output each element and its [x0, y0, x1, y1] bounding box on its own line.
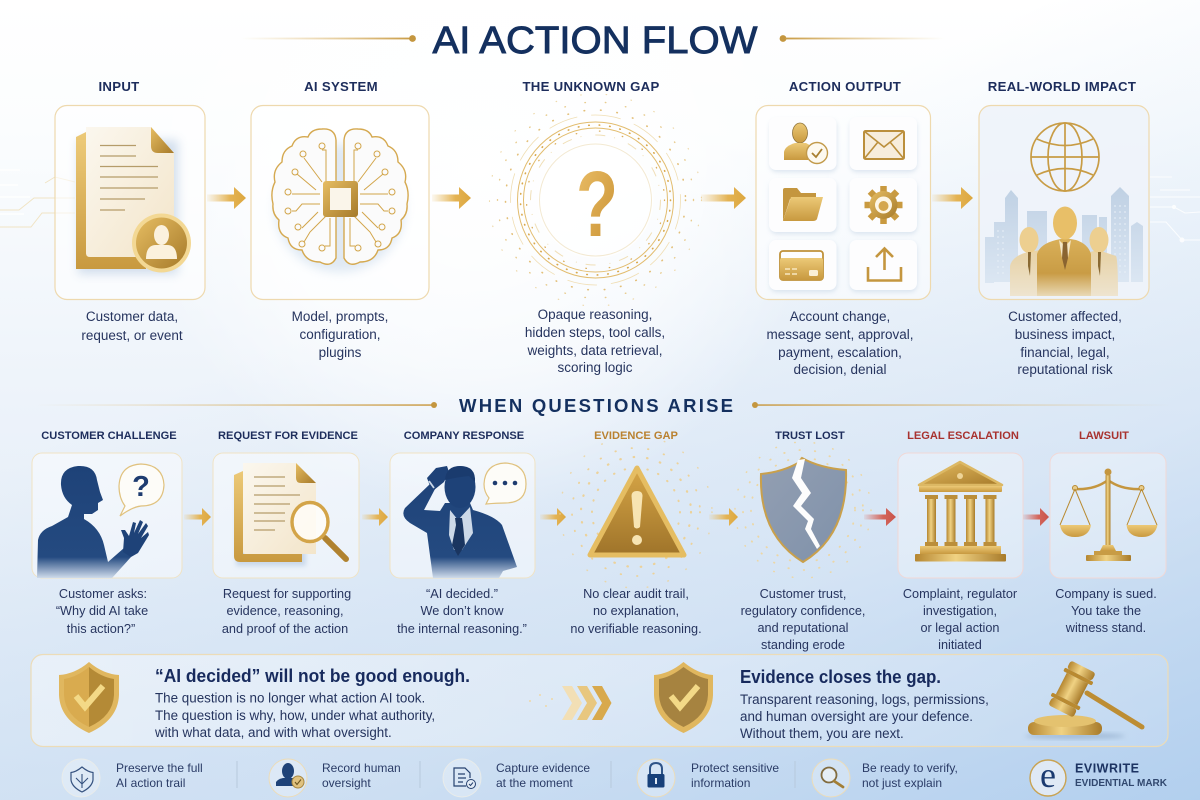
logo: Eviwrite: e: [1040, 755, 1056, 795]
caption: legal escalation: investigation,: [923, 604, 997, 618]
circuit lines left: [0, 170, 75, 227]
panel: the unknown gap: [490, 79, 702, 375]
icon: account change: [784, 123, 828, 164]
caption: action output: decision, denial: [793, 362, 887, 377]
caption: lawsuit: [1055, 587, 1157, 635]
dot field around shield: [735, 442, 871, 578]
caption: trust lost: regulatory confidence,: [741, 604, 865, 618]
caption: trust lost: [741, 587, 865, 652]
title: [241, 20, 945, 62]
callout: evidence closes the gap: [740, 666, 989, 741]
arrow: unknown gap to action output: [701, 187, 746, 209]
caption: real-world impact: business impact,: [1015, 327, 1115, 342]
caption: unknown gap: weights, data retrieval,: [526, 343, 663, 358]
logo: Eviwrite: [1030, 755, 1168, 796]
heading: real-world impact: REAL-WORLD IMPACT: [988, 79, 1136, 94]
icon: question mark in rings: ?: [576, 152, 618, 256]
logo: Eviwrite: EVIDENTIAL MARK: [1075, 778, 1168, 789]
icon: folder: [783, 188, 823, 221]
caption: action output: payment, escalation,: [778, 345, 902, 360]
icon: shield with check: [654, 662, 713, 733]
icon: customer silhouette with question: [37, 464, 164, 578]
heading: customer challenge: CUSTOMER CHALLENGE: [41, 430, 177, 442]
icon: three people: [1010, 206, 1118, 296]
item: protect information: information: [691, 776, 750, 790]
callout: evidence closes the gap: and human oversight are your defence.: [740, 709, 973, 724]
step: evidence gap: [560, 430, 712, 636]
caption: company response: [397, 587, 527, 636]
caption: unknown gap: hidden steps, tool calls,: [525, 325, 665, 340]
heading: request for evidence: REQUEST FOR EVIDENCE: [218, 430, 358, 442]
callout: AI decided: with what data, and with what oversight.: [154, 725, 392, 740]
icon: circuit brain: [272, 129, 408, 272]
item: human oversight: [269, 759, 401, 797]
heading: company response: COMPANY RESPONSE: [404, 430, 524, 442]
icon: warning triangle: [590, 468, 684, 555]
caption: real-world impact: reputational risk: [1017, 362, 1113, 377]
step: trust lost: [735, 430, 871, 652]
step: company response: [390, 430, 535, 636]
icon: broken shield: [761, 458, 846, 562]
callout: evidence closes the gap: Evidence closes the gap.: [740, 666, 941, 687]
callout: AI decided: The question is no longer what action AI took.: [155, 690, 425, 706]
caption: AI system: plugins: [319, 345, 362, 360]
icon: gear: [864, 186, 902, 224]
icon: question mark in rings: [490, 94, 702, 306]
caption: company response: We don’t know: [421, 604, 504, 618]
caption: unknown gap: [525, 307, 665, 375]
step: legal escalation: [898, 430, 1023, 652]
step: request for evidence: [213, 430, 359, 636]
caption: lawsuit: Company is sued.: [1055, 587, 1157, 601]
icon: message sent: [864, 131, 904, 159]
caption: request for evidence: Request for supporting: [223, 587, 351, 601]
item: preserve trail: AI action trail: [116, 776, 185, 790]
caption: legal escalation: or legal action: [920, 621, 1000, 635]
step: lawsuit: [1050, 430, 1166, 635]
caption: evidence gap: No clear audit trail,: [583, 587, 689, 601]
caption: input: Customer data,: [86, 309, 178, 324]
caption: legal escalation: Complaint, regulator: [903, 587, 1018, 601]
heading: input: INPUT: [98, 79, 140, 94]
item: protect information: Protect sensitive: [691, 761, 779, 775]
panel: conclusion banner: [31, 654, 1168, 746]
heading: legal escalation: LEGAL ESCALATION: [907, 430, 1019, 442]
caption: company response: the internal reasoning.”: [397, 622, 527, 636]
caption: action output: message sent, approval,: [766, 327, 914, 342]
callout: AI decided: “AI decided” will not be good enough.: [155, 665, 470, 686]
caption: customer challenge: this action?”: [67, 622, 135, 636]
tile shadows: [770, 120, 917, 292]
heading: action output: ACTION OUTPUT: [789, 79, 901, 94]
caption: evidence gap: no verifiable reasoning.: [570, 622, 702, 636]
caption: evidence gap: no explanation,: [593, 604, 679, 618]
caption: action output: Account change,: [790, 309, 890, 324]
caption: input: request, or event: [81, 328, 183, 343]
arrow: AI system to unknown gap: [432, 187, 471, 209]
item: human oversight: Record human: [322, 761, 401, 775]
caption: unknown gap: scoring logic: [557, 360, 633, 375]
callout: evidence closes the gap: Without them, you are next.: [740, 726, 904, 741]
icon: scales of justice: [1060, 468, 1158, 561]
icon: customer silhouette with question: ?: [132, 471, 150, 503]
caption: customer challenge: “Why did AI take: [56, 604, 148, 618]
logo: Eviwrite: EVIWRITE: [1075, 762, 1139, 776]
item: capture evidence: at the moment: [496, 776, 573, 790]
caption: real-world impact: financial, legal,: [1020, 345, 1110, 360]
step: customer challenge: [32, 430, 182, 636]
caption: request for evidence: [222, 587, 351, 636]
dividers: [237, 761, 795, 788]
panel: real-world impact: [979, 79, 1149, 377]
arrow: request to company response: [362, 508, 388, 526]
circuit lines right: [1150, 177, 1200, 242]
callout: evidence closes the gap: Transparent reasoning, logs, permissions,: [740, 692, 989, 707]
item: preserve trail: Preserve the full: [116, 761, 203, 775]
section heading: when questions arise: WHEN QUESTIONS ARISE: [459, 395, 733, 416]
heading: trust lost: TRUST LOST: [775, 430, 845, 442]
caption: evidence gap: [570, 587, 702, 636]
heading: unknown gap: THE UNKNOWN GAP: [522, 79, 660, 94]
caption: unknown gap: Opaque reasoning,: [538, 307, 652, 322]
item: capture evidence: [443, 759, 590, 797]
icon: confused person silhouette: [403, 463, 526, 578]
item: preserve trail: [62, 759, 203, 797]
caption: customer challenge: Customer asks:: [59, 587, 147, 601]
caption: company response: “AI decided.”: [426, 587, 498, 601]
caption: trust lost: standing erode: [761, 638, 845, 652]
heading: AI system: AI SYSTEM: [304, 79, 378, 94]
tile faces: [769, 117, 917, 290]
caption: request for evidence: and proof of the action: [222, 622, 348, 636]
caption: real-world impact: Customer affected,: [1008, 309, 1122, 324]
caption: AI system: Model, prompts,: [292, 309, 388, 324]
item: ready to verify: not just explain: [862, 776, 942, 790]
item: protect information: [637, 759, 779, 797]
item: ready to verify: Be ready to verify,: [862, 761, 958, 775]
icon: upload: [868, 248, 901, 280]
panel: input: [55, 79, 205, 343]
icon: document with magnifier: [234, 463, 346, 566]
dot field around warning: [560, 436, 712, 588]
caption: customer challenge: [56, 587, 148, 636]
caption: trust lost: and reputational: [758, 621, 848, 635]
arrow: legal to lawsuit: [1023, 508, 1049, 526]
title: AI ACTION FLOW: [432, 20, 758, 62]
caption: trust lost: Customer trust,: [760, 587, 846, 601]
item: capture evidence: Capture evidence: [496, 761, 590, 775]
caption: legal escalation: initiated: [938, 638, 982, 652]
caption: request for evidence: evidence, reasoning,: [226, 604, 344, 618]
heading: evidence gap: EVIDENCE GAP: [594, 430, 679, 442]
arrow: evidence gap to trust lost: [709, 508, 738, 526]
caption: AI system: configuration,: [299, 327, 381, 342]
callout: AI decided: [154, 665, 470, 740]
item: human oversight: oversight: [322, 776, 371, 790]
footer: recommendations: [62, 755, 1168, 797]
arrow: response to evidence gap: [540, 508, 566, 526]
icon: courthouse: [915, 462, 1006, 562]
caption: legal escalation: [903, 587, 1018, 652]
icon: gavel: [1025, 659, 1142, 739]
heading: lawsuit: LAWSUIT: [1079, 430, 1129, 442]
caption: lawsuit: You take the: [1071, 604, 1141, 618]
section heading: when questions arise: [36, 395, 1171, 416]
arrow: challenge to evidence request: [184, 508, 211, 526]
caption: lawsuit: witness stand.: [1065, 621, 1146, 635]
icon: document with user badge: [76, 127, 191, 274]
arrow: input to AI system: [207, 187, 246, 209]
icon: payment card: [780, 251, 823, 280]
caption: real-world impact: [1008, 309, 1122, 377]
arrow: trust lost to legal: [864, 508, 896, 526]
panel: AI system: [251, 79, 429, 360]
panel: action output: [756, 79, 930, 377]
city skyline: [985, 187, 1143, 283]
item: ready to verify: [812, 759, 958, 797]
arrow: action output to impact: [932, 187, 973, 209]
caption: action output: [766, 309, 914, 377]
callout: AI decided: The question is why, how, under what authority,: [155, 708, 435, 723]
caption: AI system: [292, 309, 388, 360]
caption: input: [81, 309, 183, 343]
icon: globe: [1031, 123, 1099, 191]
icon: gold shield with check: [59, 662, 119, 733]
chevrons: [529, 686, 612, 720]
